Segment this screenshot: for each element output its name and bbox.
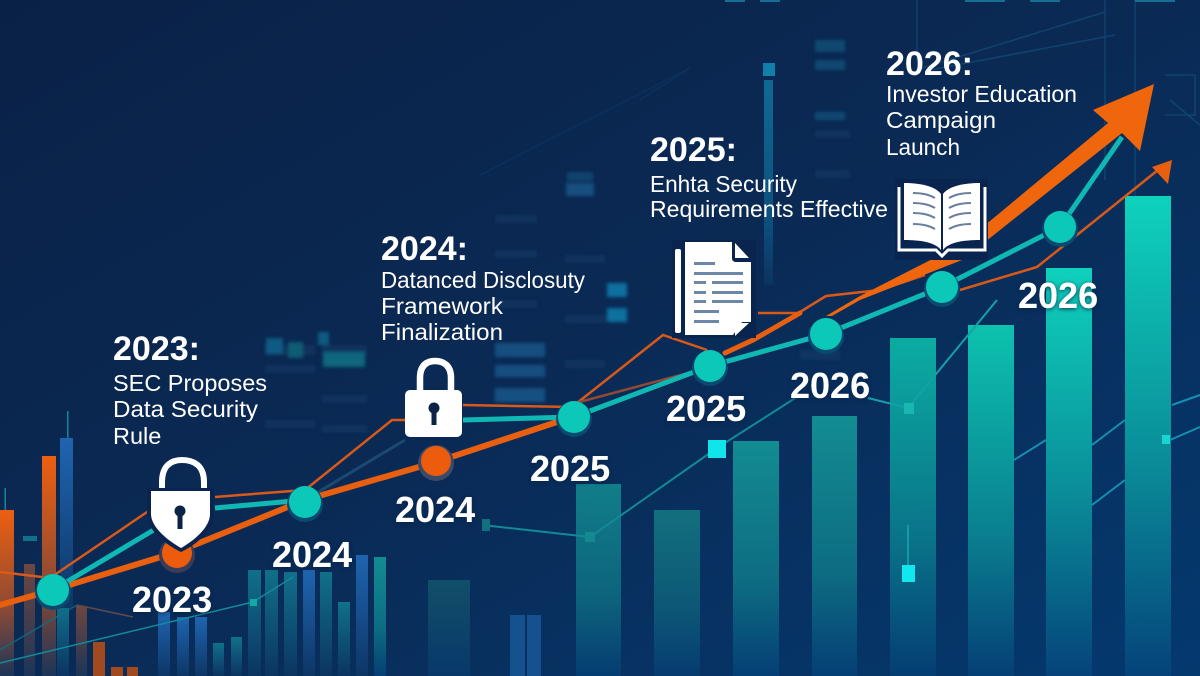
milestone text: 2023: Data Security xyxy=(113,396,258,422)
background: blurred city and data panels xyxy=(265,40,850,433)
background: faint grid lines upper right xyxy=(480,0,1200,215)
milestone text: 2023 xyxy=(113,330,267,449)
milestone text: 2026 xyxy=(886,45,1077,160)
year labels along the trend line xyxy=(132,275,1098,620)
milestone text: 2026: Launch xyxy=(886,134,960,160)
milestone text: 2024: Finalization xyxy=(381,319,503,345)
milestone text: 2023: 2023: xyxy=(113,330,200,368)
bar chart: small blue bars xyxy=(57,555,541,676)
thin trend lines in the lower chart xyxy=(0,300,1200,663)
year labels along the trend line: 2026 xyxy=(790,365,870,406)
milestone text: 2023: Rule xyxy=(113,423,161,449)
milestone text: 2026: 2026: xyxy=(886,45,973,83)
year labels along the trend line: 2025 xyxy=(530,448,610,489)
large orange arrow xyxy=(826,84,1154,316)
background: vertical glowing column xyxy=(763,63,775,285)
icon: padlock 2024 xyxy=(405,361,462,437)
thick orange trend line xyxy=(0,313,800,605)
data point markers xyxy=(250,403,1170,606)
milestone text: 2023: SEC Proposes xyxy=(113,370,267,396)
milestone text: 2024 xyxy=(381,230,585,345)
icon: open book 2026 xyxy=(895,179,988,260)
milestone text: 2025: 2025: xyxy=(650,131,737,169)
bar chart: right rising teal bars xyxy=(428,196,1171,676)
milestone text: 2024: Datanced Disclosuty xyxy=(381,267,585,293)
icon: document 2025 xyxy=(672,240,756,338)
teal trend line xyxy=(53,137,1122,590)
milestone text: 2024: 2024: xyxy=(381,230,468,268)
milestone text: 2024: Framework xyxy=(381,293,503,319)
milestone text: 2026: Campaign xyxy=(886,107,996,133)
background: top edge marks xyxy=(725,0,1175,2)
thin orange arrow xyxy=(960,160,1172,290)
year labels along the trend line: 2023 xyxy=(132,579,212,620)
milestone text: 2025: Requirements Effective xyxy=(650,196,888,222)
thin orange trend line xyxy=(0,275,925,578)
year labels along the trend line: 2025 xyxy=(666,388,746,429)
year labels along the trend line: 2024 xyxy=(272,534,352,575)
year labels along the trend line: 2026 xyxy=(1018,275,1098,316)
milestone text: 2026: Investor Education xyxy=(886,81,1077,107)
icon: shield padlock 2023 xyxy=(147,460,214,552)
milestone text: 2025 xyxy=(650,131,888,222)
year labels along the trend line: 2024 xyxy=(395,489,475,530)
milestone text: 2025: Enhta Security xyxy=(650,171,797,197)
timeline nodes xyxy=(35,211,1078,610)
bar chart: left orange and blue candles xyxy=(0,411,138,676)
